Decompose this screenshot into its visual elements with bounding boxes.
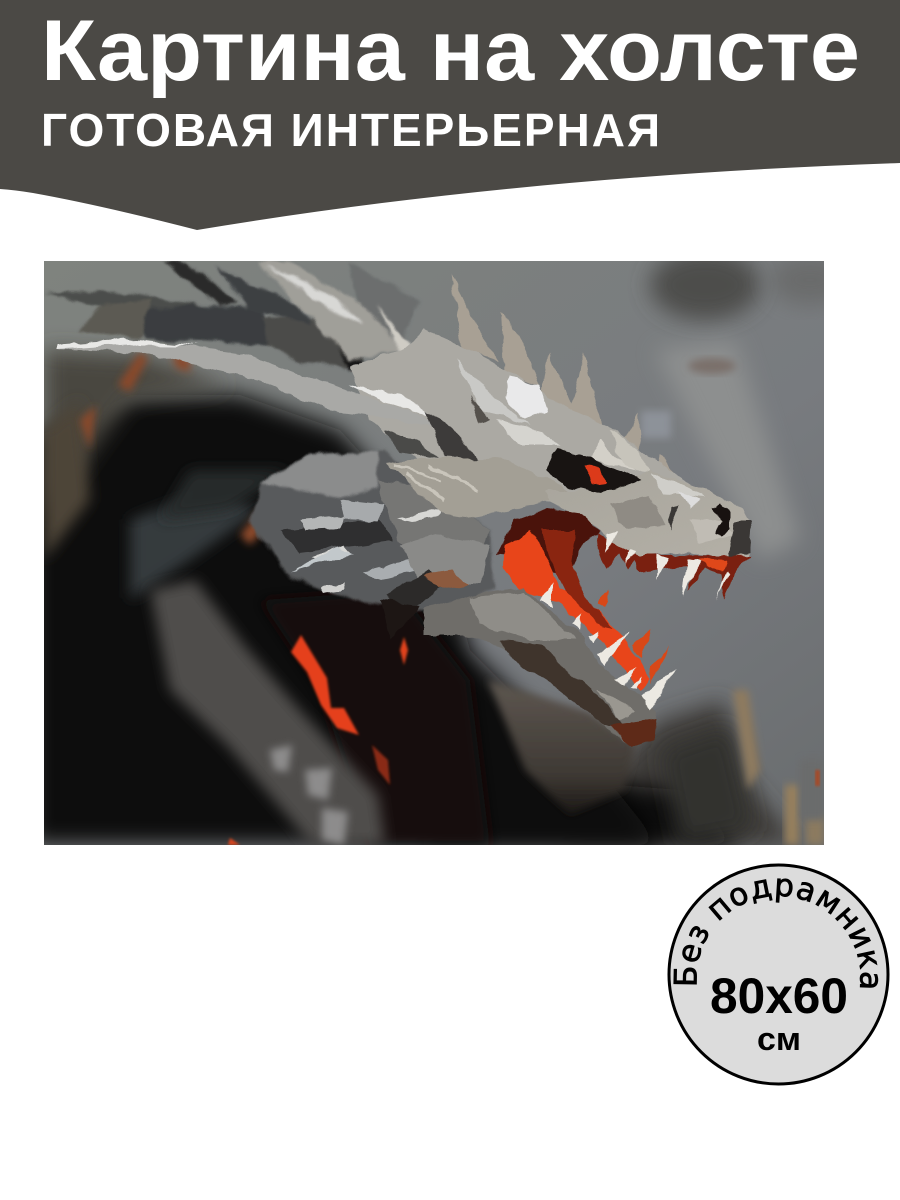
crest bright plates — [385, 358, 650, 475]
curved badge label: Без подрамника — [673, 878, 878, 988]
dark body mass — [30, 350, 660, 845]
lower jaw shading — [470, 592, 657, 747]
lower jaw — [424, 588, 657, 745]
bright gum section — [700, 558, 726, 572]
orange fins — [597, 590, 669, 682]
upper teeth — [605, 530, 729, 600]
header banner — [0, 0, 900, 230]
eye socket — [545, 448, 641, 495]
dark top feathers — [44, 261, 420, 370]
painting background — [44, 261, 824, 845]
badge dimensions: 80x60 — [710, 968, 848, 1024]
title: Картина на холсте — [41, 3, 860, 99]
dark mouth interior — [497, 509, 601, 575]
snout details — [610, 472, 735, 545]
background tonal patches — [424, 250, 850, 845]
orange mouth and tongue — [503, 530, 651, 692]
subtitle: ГОТОВАЯ ИНТЕРЬЕРНАЯ — [41, 104, 660, 156]
warm ember smudges — [77, 352, 261, 548]
upper skull mass — [350, 330, 700, 510]
lower teeth — [542, 583, 677, 710]
badge unit: см — [757, 1021, 801, 1057]
banner shape — [0, 0, 900, 230]
badge circle — [669, 865, 888, 1084]
badge: frameless canvas size — [668, 864, 890, 1086]
nostril — [711, 503, 730, 537]
crest stroke highlight — [57, 339, 435, 418]
grey neck scales — [250, 451, 495, 640]
jaw underside grey wedge — [488, 680, 636, 815]
red gum under the upper jaw — [596, 533, 750, 600]
silver crest strokes — [258, 261, 412, 364]
tongue dark red stroke — [541, 530, 612, 628]
snout — [545, 470, 751, 556]
neck fire streak — [228, 635, 408, 845]
ear plate streaks — [395, 465, 480, 500]
red eye — [584, 466, 609, 485]
painting: dragon on canvas — [30, 250, 850, 845]
snout tip shadow — [728, 522, 752, 558]
long white crest stroke — [58, 338, 368, 415]
crest spikes — [451, 274, 680, 480]
ear plate — [387, 458, 591, 518]
coil highlights — [270, 745, 348, 845]
lower-left grey coil — [150, 580, 385, 845]
